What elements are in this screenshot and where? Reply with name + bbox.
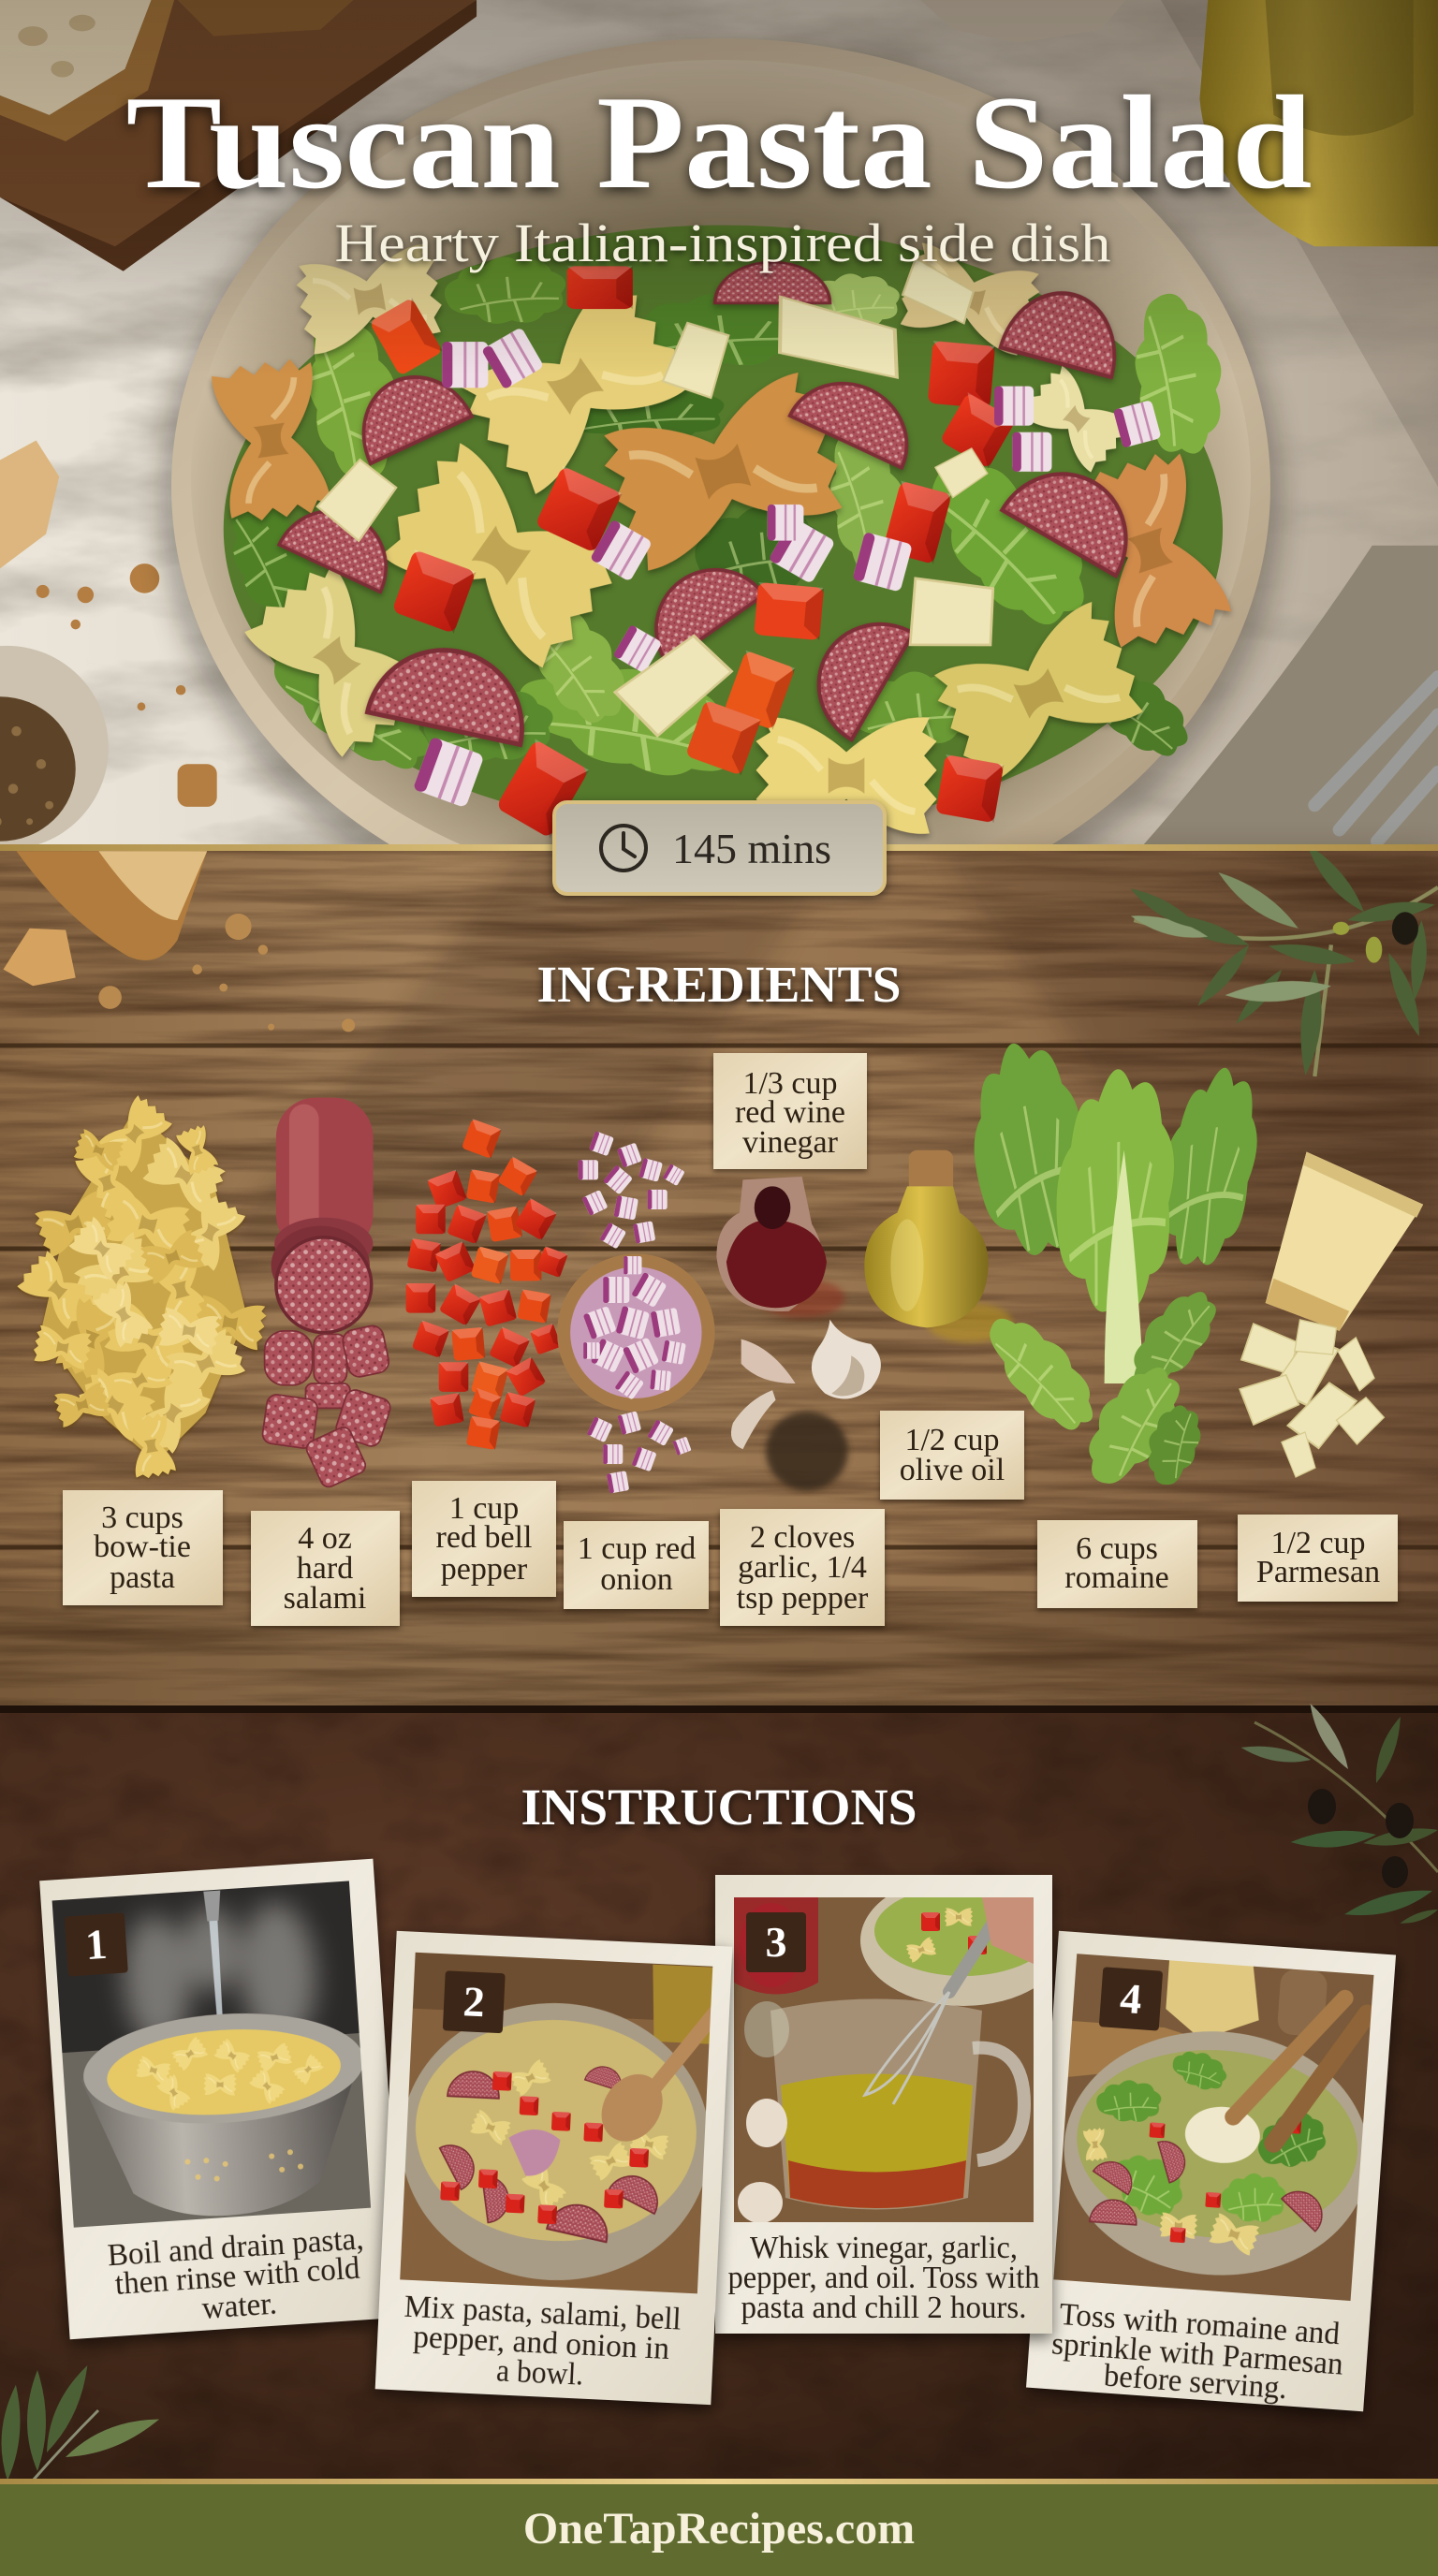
number badge 3: 3 bbox=[766, 1918, 786, 1966]
step 3 text: Whisk vinegar, garlic, bbox=[750, 2231, 1018, 2265]
label: olive oil: 1/2 cup bbox=[904, 1423, 1000, 1457]
panel: instructions bbox=[0, 1700, 1438, 2481]
number badge 2: 2 bbox=[462, 1977, 486, 2026]
heading: instructions: INSTRUCTIONS bbox=[521, 1779, 917, 1837]
label: romaine: romaine bbox=[1064, 1560, 1169, 1595]
salami bbox=[261, 1098, 392, 1489]
spice bowl bbox=[0, 646, 109, 850]
label: pasta: pasta bbox=[110, 1560, 175, 1595]
top shade bbox=[0, 0, 1438, 374]
step 3 text: pepper, and oil. Toss with bbox=[728, 2261, 1039, 2295]
icon: clock bbox=[601, 826, 646, 871]
label: romaine bbox=[1037, 1520, 1197, 1608]
step 3 card bbox=[715, 1875, 1066, 2334]
photo: whisking dressing bbox=[734, 1875, 1066, 2223]
red onion pile and bowl bbox=[557, 1131, 715, 1494]
number badge 1: 1 bbox=[84, 1920, 109, 1969]
step 2 card bbox=[375, 1931, 732, 2405]
black pepper bbox=[766, 1412, 848, 1490]
title: Tuscan Pasta Salad bbox=[125, 68, 1313, 216]
footer band bbox=[0, 2479, 1438, 2576]
dark background bbox=[0, 1705, 1438, 2481]
salad bbox=[211, 225, 1234, 839]
step 4 text: before serving. bbox=[1103, 2358, 1288, 2406]
step 2 text: a bowl. bbox=[495, 2353, 584, 2393]
step 2 text bbox=[401, 2290, 682, 2396]
olive oil bottle bbox=[864, 1150, 1012, 1342]
photo: mixing bowl bbox=[394, 1952, 718, 2294]
fork bbox=[1314, 677, 1438, 842]
footer website: OneTapRecipes.com bbox=[523, 2504, 915, 2554]
label: parmesan: 1/2 cup bbox=[1270, 1526, 1366, 1560]
time divider and badge bbox=[0, 802, 1438, 894]
subtitle: Hearty Italian-inspired side dish bbox=[335, 212, 1110, 273]
number badge 4: 4 bbox=[1119, 1974, 1143, 2023]
garlic bbox=[731, 1320, 881, 1449]
romaine bbox=[960, 1036, 1269, 1498]
badge: cook time: 145 mins bbox=[672, 825, 831, 872]
label: salami: salami bbox=[284, 1581, 366, 1616]
step 1 text bbox=[107, 2221, 369, 2332]
number badge 1 bbox=[65, 1912, 128, 1977]
marble counter bbox=[0, 0, 1438, 847]
step 4 card bbox=[1026, 1931, 1396, 2411]
red pepper bbox=[369, 266, 1016, 839]
label: bell pepper: 1 cup bbox=[449, 1491, 519, 1526]
label: onion bbox=[564, 1521, 709, 1609]
label: onion: 1 cup red bbox=[578, 1531, 696, 1566]
photo: tossing with romaine bbox=[1053, 1954, 1382, 2302]
step 4 text: Toss with romaine and bbox=[1058, 2297, 1341, 2351]
label: parmesan: Parmesan bbox=[1256, 1555, 1380, 1589]
label: vinegar: 1/3 cup bbox=[742, 1066, 838, 1101]
number badge 4 bbox=[1099, 1967, 1163, 2031]
label: salami bbox=[251, 1511, 400, 1626]
parmesan shavings bbox=[312, 254, 1005, 743]
label: pasta: 3 cups bbox=[101, 1500, 183, 1535]
farfalle bbox=[211, 242, 1234, 834]
parmesan bbox=[1235, 1152, 1423, 1479]
olive branch bbox=[1126, 840, 1438, 1076]
olive branch bottom left bbox=[0, 2362, 163, 2481]
label: salami: 4 oz bbox=[298, 1521, 352, 1556]
step 3 text: pasta and chill 2 hours. bbox=[741, 2291, 1026, 2325]
step 2 text: pepper, and onion in bbox=[412, 2320, 670, 2366]
label: olive oil: olive oil bbox=[900, 1453, 1005, 1487]
chopped red bell pepper bbox=[406, 1119, 568, 1450]
photo: colander bbox=[52, 1881, 374, 2231]
step 1 card bbox=[39, 1859, 404, 2339]
step 1 text: water. bbox=[201, 2287, 278, 2326]
label: romaine: 6 cups bbox=[1076, 1531, 1158, 1566]
lettuce bbox=[215, 256, 1228, 795]
salami bbox=[279, 262, 1151, 744]
badge: cook time bbox=[554, 802, 885, 894]
label: vinegar: red wine bbox=[735, 1095, 845, 1130]
red onion bbox=[413, 327, 1162, 808]
vinegar jar bbox=[716, 1177, 844, 1318]
baguette bbox=[4, 851, 207, 986]
number badge 3 bbox=[746, 1912, 806, 1972]
wood table bbox=[0, 847, 1438, 1708]
step 3 text bbox=[728, 2231, 1039, 2325]
step 1 text: Boil and drain pasta, bbox=[107, 2221, 364, 2273]
olive branch top right bbox=[1240, 1700, 1438, 1927]
crumbs bbox=[98, 914, 355, 1032]
step 2 text: Mix pasta, salami, bell bbox=[404, 2290, 682, 2337]
step 1 text: then rinse with cold bbox=[114, 2251, 361, 2302]
label: bell pepper bbox=[412, 1481, 556, 1597]
label: pasta bbox=[63, 1490, 223, 1605]
bow-tie pasta pile bbox=[15, 1093, 268, 1480]
label: salami: hard bbox=[297, 1551, 353, 1586]
label: pasta: bow-tie bbox=[94, 1530, 191, 1564]
label: garlic and pepper: garlic, 1/4 bbox=[738, 1550, 867, 1585]
props: board, bread, oil, cup bbox=[0, 0, 1438, 850]
label: parmesan bbox=[1238, 1515, 1398, 1602]
number badge 2 bbox=[443, 1970, 506, 2033]
napkin bbox=[1142, 546, 1438, 846]
label: bell pepper: red bell bbox=[436, 1520, 532, 1555]
panel: ingredients bbox=[0, 840, 1438, 1708]
step 4 text bbox=[1049, 2296, 1346, 2410]
label: garlic and pepper: tsp pepper bbox=[737, 1581, 869, 1616]
step 4 text: sprinkle with Parmesan bbox=[1050, 2326, 1344, 2382]
label: onion: onion bbox=[600, 1562, 673, 1597]
label: olive oil bbox=[880, 1411, 1024, 1500]
label: vinegar bbox=[713, 1053, 867, 1169]
panel: hero photo bbox=[0, 0, 1438, 844]
label: vinegar: vinegar bbox=[742, 1125, 839, 1160]
label: garlic and pepper: 2 cloves bbox=[750, 1520, 855, 1555]
bowl bbox=[159, 38, 1283, 959]
label: bell pepper: pepper bbox=[441, 1552, 528, 1587]
crumbs bbox=[37, 564, 217, 807]
heading: ingredients: INGREDIENTS bbox=[537, 957, 901, 1014]
label: garlic and pepper bbox=[720, 1509, 885, 1626]
